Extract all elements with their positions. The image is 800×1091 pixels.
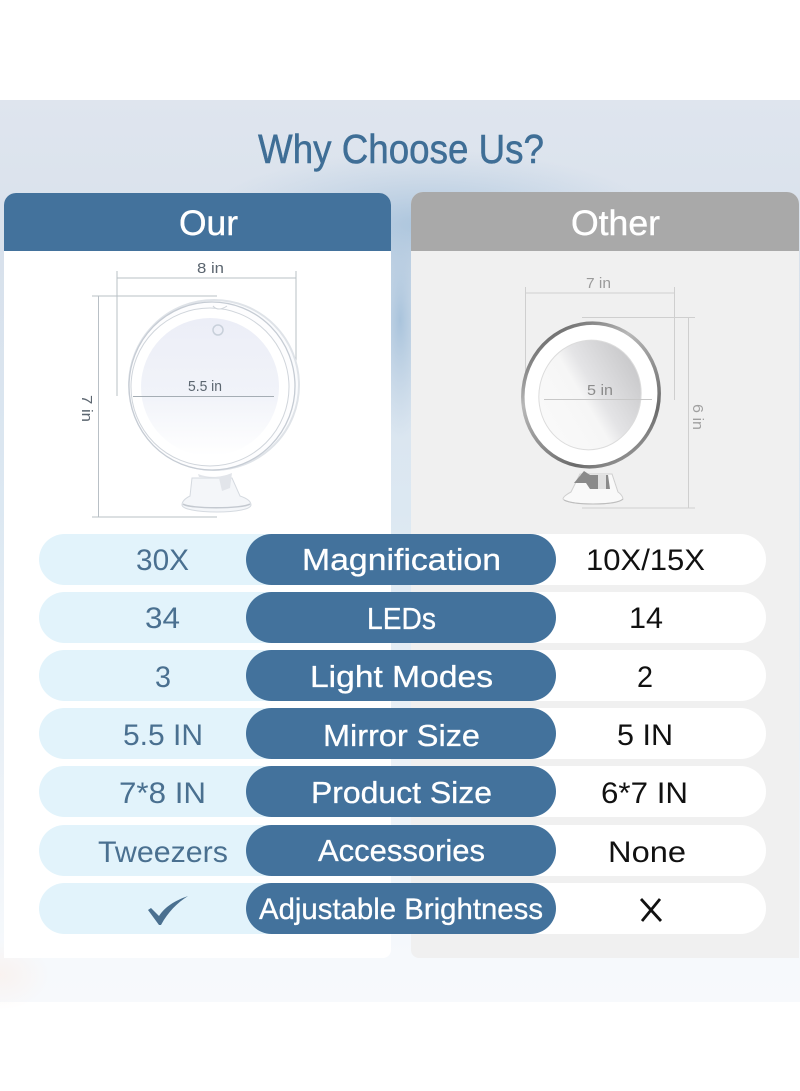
- icon: cross mark: [641, 899, 661, 921]
- comparison row: mirror size: 5 IN: [617, 719, 673, 752]
- comparison row: LEDs: LEDs: [367, 601, 436, 636]
- comparison row: magnification: 30X: [136, 544, 189, 577]
- comparison row: product size: 6*7 IN: [601, 777, 688, 810]
- comparison row: magnification: 10X/15X: [586, 544, 705, 577]
- comparison row: accessories: [39, 825, 766, 876]
- comparison row: LEDs: 34: [145, 602, 180, 635]
- comparison row: adjustable brightness: [39, 883, 766, 934]
- our header: [4, 193, 391, 251]
- comparison row: light modes: [39, 650, 766, 701]
- label: 5.5 in: 5.5 in: [188, 378, 222, 395]
- comparison row: product size: [39, 766, 766, 817]
- comparison row: mirror size: [39, 708, 766, 759]
- icon: other mirror: [510, 310, 672, 504]
- comparison row: light modes: 2: [637, 661, 653, 694]
- comparison row: adjustable brightness: Adjustable Brightness: [259, 893, 543, 926]
- comparison row: mirror size: 5.5 IN: [123, 719, 203, 752]
- comparison row: light modes: 3: [155, 661, 171, 694]
- title: Why Choose Us?: [258, 126, 544, 172]
- comparison row: product size: 7*8 IN: [119, 777, 206, 810]
- icon: check mark: [148, 896, 188, 925]
- comparison row: accessories: Accessories: [318, 833, 485, 868]
- comparison row: accessories: Tweezers: [98, 836, 228, 869]
- panel: other: [411, 192, 799, 958]
- label: 7 in: 7 in: [78, 395, 95, 422]
- label: 6 in: 6 in: [689, 404, 706, 430]
- comparison row: accessories: None: [608, 836, 686, 869]
- other header: [411, 192, 799, 251]
- our heading: Our: [179, 204, 238, 243]
- comparison row: LEDs: [39, 592, 766, 643]
- comparison row: magnification: Magnification: [302, 542, 501, 577]
- label: 5 in: 5 in: [587, 382, 613, 399]
- dimension diagram: our mirror: [78, 260, 299, 517]
- comparison row: magnification: [39, 534, 766, 585]
- comparison row: LEDs: 14: [629, 602, 663, 635]
- comparison row: mirror size: Mirror Size: [323, 718, 480, 753]
- icon: our mirror: [129, 300, 299, 512]
- panel: our: [4, 193, 391, 958]
- comparison row: light modes: Light Modes: [310, 659, 493, 694]
- comparison row: product size: Product Size: [311, 775, 492, 810]
- label: 7 in: 7 in: [586, 275, 611, 292]
- label: 8 in: 8 in: [197, 260, 224, 277]
- dimension diagram: other mirror: [510, 275, 706, 508]
- other heading: Other: [571, 204, 660, 243]
